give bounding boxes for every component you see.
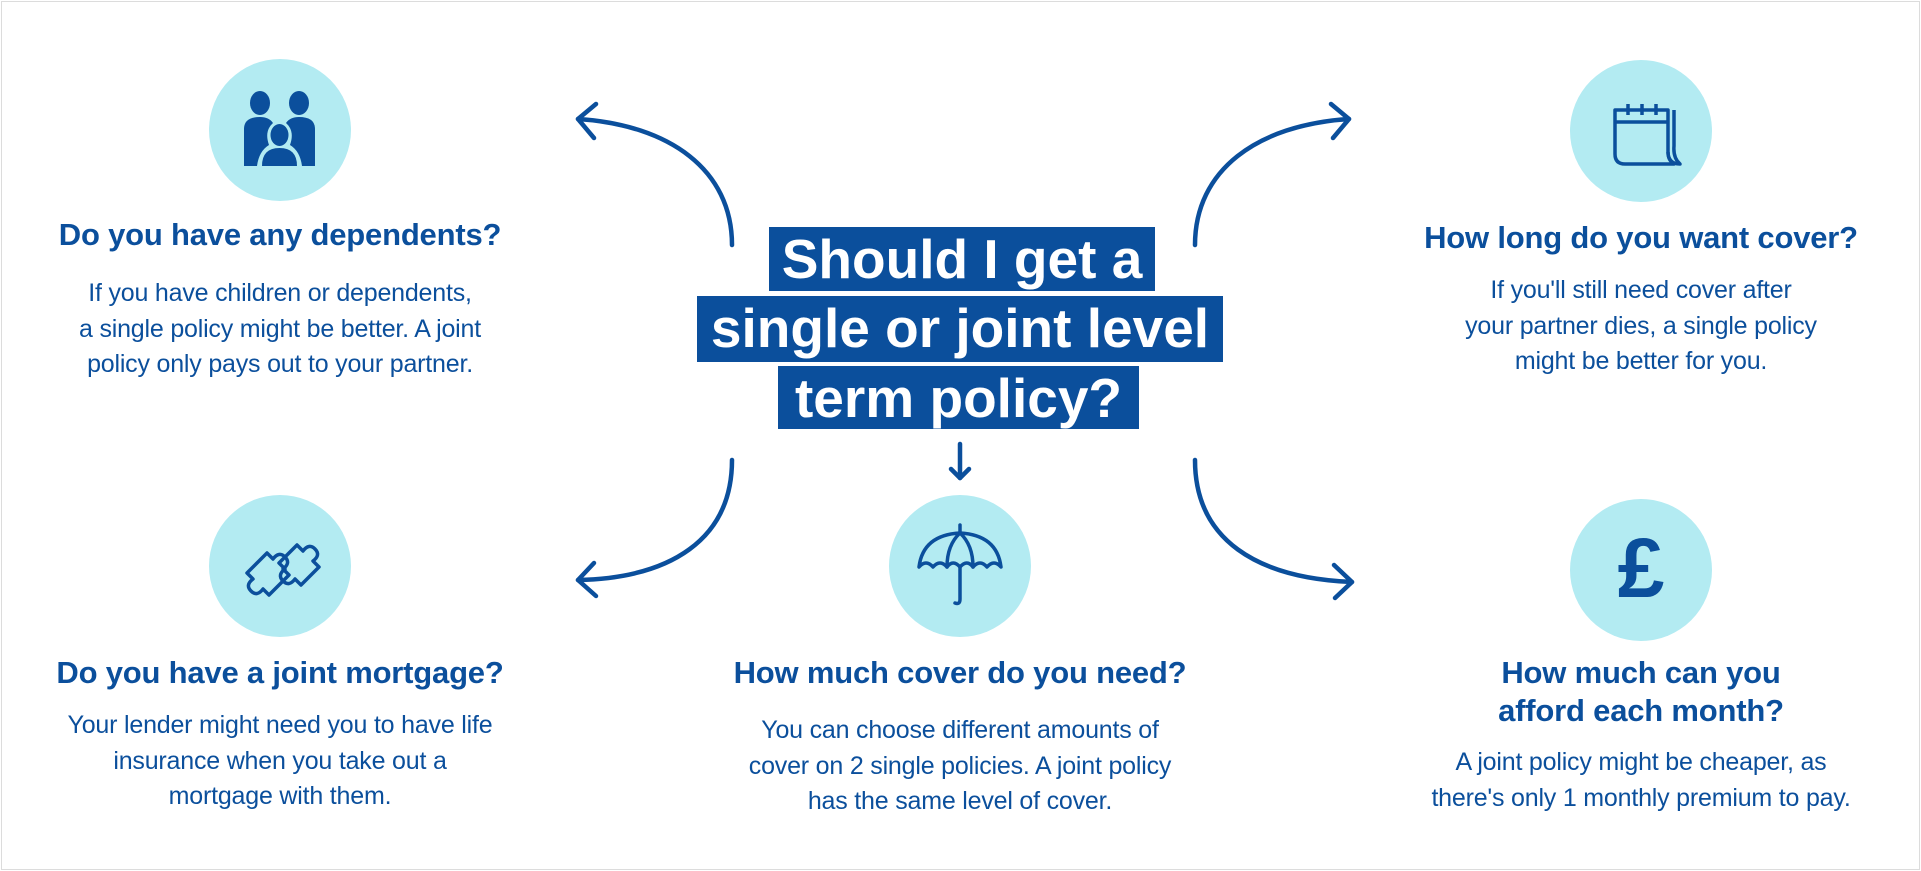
text: afford [1431, 748, 1851, 812]
text: joint mortgage: Your lender might need you to have life [68, 711, 492, 739]
icon: pound: £ [1618, 521, 1664, 615]
text: how long [1465, 276, 1817, 375]
text: joint mortgage: mortgage with them. [169, 782, 391, 810]
text: how much cover: You can choose different amounts of [761, 716, 1159, 744]
text: afford: there's only 1 monthly premium to pay. [1431, 784, 1851, 812]
text: dependents: If you have children or dependents, [88, 279, 472, 307]
heading: afford: How much can you [1501, 655, 1781, 690]
text: joint mortgage: insurance when you take out a [113, 746, 447, 774]
text: afford: A joint policy might be cheaper, as [1455, 748, 1826, 776]
text: how long: might be better for you. [1515, 347, 1767, 375]
text: dependents [79, 279, 481, 378]
text: joint mortgage [68, 711, 492, 810]
text: term policy? [795, 367, 1122, 429]
text: how long: your partner dies, a single policy [1465, 312, 1817, 340]
title [697, 227, 1223, 429]
icon: calendar [1570, 60, 1712, 202]
heading: how long: How long do you want cover? [1424, 220, 1858, 255]
heading: how much cover: How much cover do you need? [734, 655, 1186, 690]
text: dependents: a single policy might be better. A joint [79, 314, 481, 342]
heading: dependents: Do you have any dependents? [59, 217, 501, 252]
text: how much cover: has the same level of cover. [808, 787, 1112, 815]
text: Should I get a [782, 228, 1142, 290]
icon: puzzle [209, 495, 351, 637]
text: how long: If you'll still need cover after [1490, 276, 1792, 304]
heading: afford: afford each month? [1498, 693, 1784, 728]
text: how much cover: cover on 2 single policies. A joint policy [749, 752, 1171, 780]
text: how much cover [749, 716, 1172, 815]
heading: afford [1498, 655, 1784, 728]
icon: family [209, 59, 351, 201]
text: dependents: policy only pays out to your partner. [87, 350, 473, 378]
text: single or joint level [711, 297, 1209, 359]
heading: joint mortgage: Do you have a joint mortgage? [56, 655, 504, 690]
icon: umbrella [889, 495, 1031, 637]
icon: pound [1570, 499, 1712, 641]
